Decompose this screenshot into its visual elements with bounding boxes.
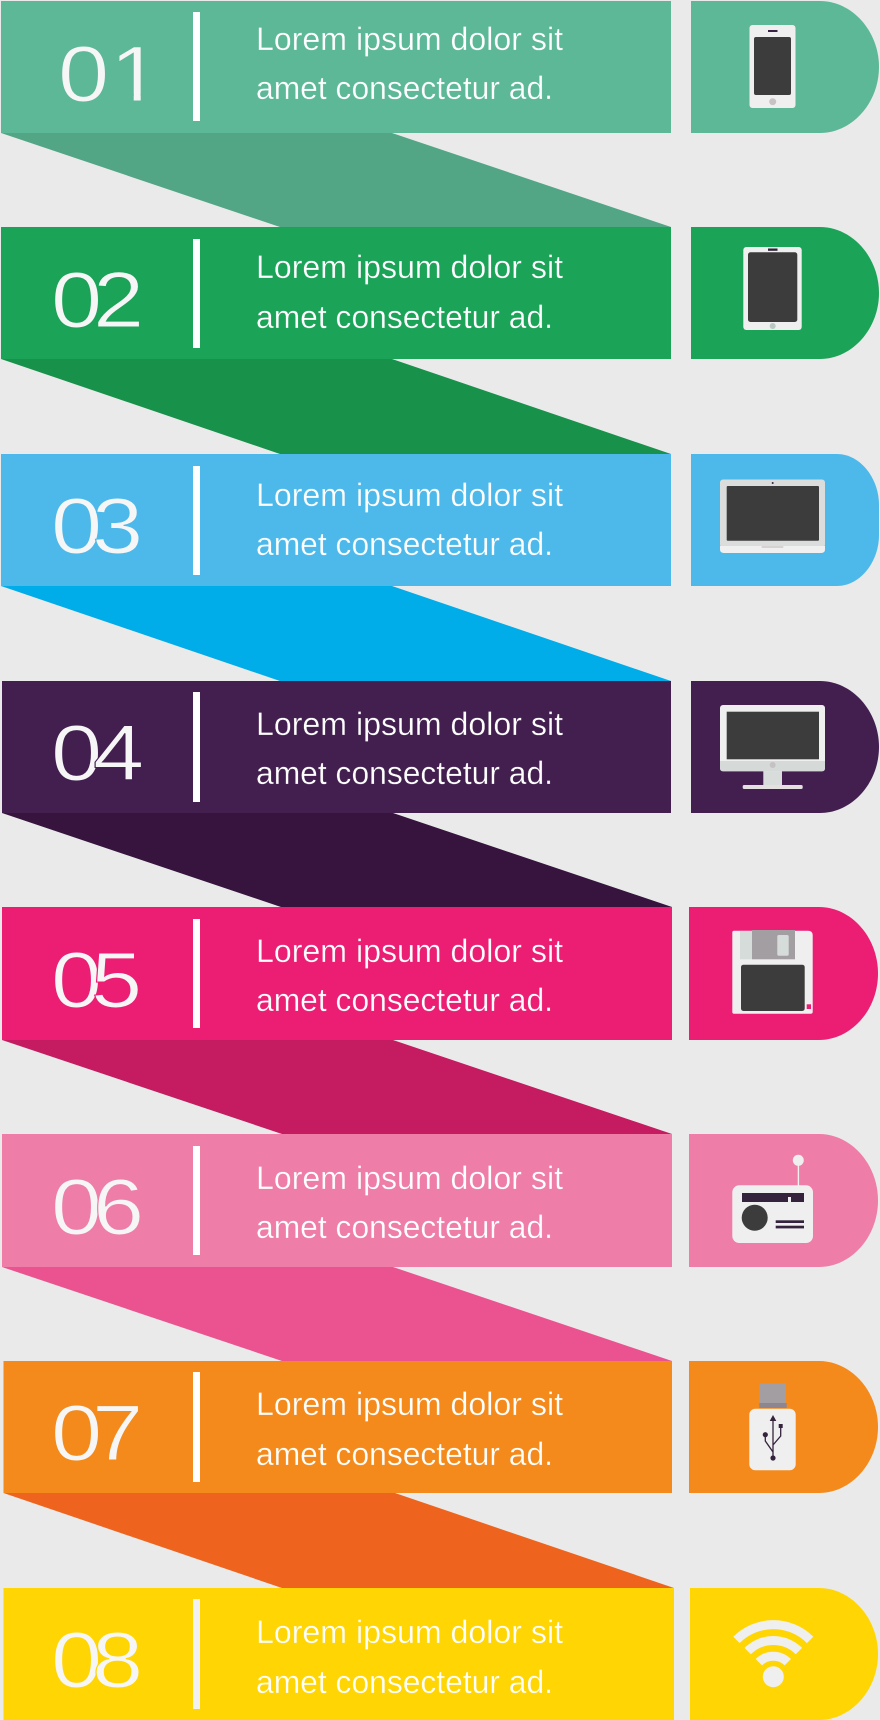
row 02 — [1, 227, 879, 454]
description 01: amet consectetur ad. — [256, 70, 553, 106]
description 02: amet consectetur ad. — [256, 299, 553, 335]
connector ribbon 05 to 06 — [2, 1040, 672, 1134]
icon: smartphone — [750, 25, 796, 108]
description 03: Lorem ipsum dolor sit — [256, 477, 563, 513]
description 06 — [256, 1160, 563, 1245]
description 03 — [256, 477, 563, 562]
description 05 — [256, 933, 563, 1018]
tab 07 — [689, 1361, 878, 1493]
description 07: Lorem ipsum dolor sit — [256, 1386, 563, 1422]
band 03 — [1, 454, 671, 586]
band 05 — [2, 907, 672, 1040]
connector ribbon 01 to 02 — [1, 133, 671, 227]
divider 05 — [193, 919, 200, 1028]
description 06: Lorem ipsum dolor sit — [256, 1160, 563, 1196]
icon: radio — [732, 1155, 813, 1243]
number 05: 05 — [51, 936, 142, 1025]
description 01 — [256, 21, 563, 106]
tab 04 — [691, 681, 879, 813]
description 02 — [256, 249, 563, 335]
connector ribbon 06 to 07 — [2, 1267, 672, 1361]
description 08: amet consectetur ad. — [256, 1664, 553, 1700]
icon: wifi — [736, 1625, 810, 1687]
band 02 — [1, 227, 671, 359]
number 02: 02 — [51, 256, 144, 345]
divider 03 — [193, 466, 200, 575]
description 04: Lorem ipsum dolor sit — [256, 706, 563, 742]
description 06: amet consectetur ad. — [256, 1209, 553, 1245]
description 08: Lorem ipsum dolor sit — [256, 1614, 563, 1650]
tab 05 — [689, 907, 878, 1040]
description 02: Lorem ipsum dolor sit — [256, 249, 563, 285]
tab 06 — [689, 1134, 878, 1267]
divider 07 — [193, 1372, 200, 1482]
number 06: 06 — [51, 1163, 144, 1252]
number 03: 03 — [51, 482, 143, 571]
tab 08 — [690, 1588, 878, 1720]
description 03: amet consectetur ad. — [256, 526, 553, 562]
row 06 — [2, 1134, 878, 1361]
description 04 — [256, 706, 563, 791]
description 08 — [256, 1614, 563, 1700]
band 04 — [2, 681, 671, 813]
description 07 — [256, 1386, 563, 1472]
number 04: 04 — [51, 709, 144, 798]
tab 01 — [691, 1, 879, 133]
connector ribbon 07 to 08 — [4, 1493, 674, 1588]
row 07 — [4, 1361, 878, 1588]
icon: floppy disk — [732, 930, 813, 1014]
divider 08 — [193, 1599, 200, 1709]
band 01 — [1, 1, 671, 133]
divider 04 — [193, 692, 200, 802]
description 04: amet consectetur ad. — [256, 755, 553, 791]
row 04 — [2, 681, 879, 907]
connector ribbon 04 to 05 — [2, 813, 672, 907]
connector ribbon 03 to 04 — [1, 586, 671, 681]
tab 03 — [691, 454, 879, 586]
number 08: 08 — [51, 1616, 143, 1705]
row 05 — [2, 907, 878, 1134]
icon: desktop monitor — [720, 705, 825, 789]
icon: tablet — [743, 247, 802, 330]
description 07: amet consectetur ad. — [256, 1436, 553, 1472]
icon: laptop — [720, 480, 825, 553]
row 08 — [4, 1588, 878, 1720]
band 06 — [2, 1134, 672, 1267]
divider 06 — [193, 1146, 200, 1255]
row 03 — [1, 454, 879, 681]
description 01: Lorem ipsum dolor sit — [256, 21, 563, 57]
band 07 — [4, 1361, 672, 1493]
description 05: amet consectetur ad. — [256, 982, 553, 1018]
divider 02 — [193, 239, 200, 348]
row 01 — [1, 1, 879, 227]
number 07: 07 — [51, 1389, 143, 1478]
tab 02 — [691, 227, 879, 359]
icon: usb stick — [749, 1383, 796, 1470]
description 05: Lorem ipsum dolor sit — [256, 933, 563, 969]
band 08 — [4, 1588, 674, 1720]
number 01: 01 — [58, 30, 161, 119]
connector ribbon 02 to 03 — [1, 359, 671, 454]
divider 01 — [193, 12, 200, 121]
